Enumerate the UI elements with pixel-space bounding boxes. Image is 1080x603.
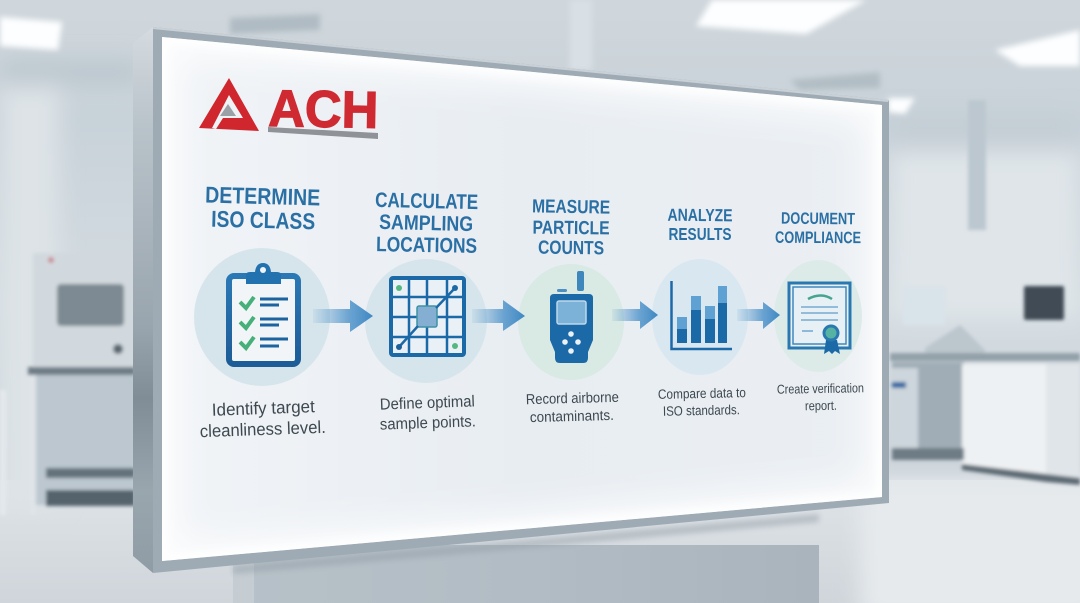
heading: ANALYZE	[667, 205, 733, 225]
description	[380, 393, 476, 434]
step 5: document compliance	[774, 210, 864, 413]
description: cleanliness level.	[199, 417, 326, 441]
description: Compare data to	[658, 385, 746, 402]
panel: signage content	[194, 78, 864, 441]
step 2: calculate sampling locations	[365, 189, 487, 434]
heading: CALCULATE	[375, 189, 478, 214]
arrow: step 3 to 4	[612, 301, 658, 329]
icon: bar chart	[672, 281, 732, 349]
sign screen	[162, 37, 882, 561]
logo wordmark: ACH	[268, 80, 379, 140]
heading: ISO CLASS	[211, 206, 316, 234]
heading	[375, 189, 478, 258]
icon circle	[518, 264, 624, 380]
description: Create verification	[777, 380, 864, 397]
description: sample points.	[380, 413, 476, 434]
arrow: step 1 to 2	[313, 300, 373, 332]
heading	[205, 182, 321, 234]
description	[526, 390, 619, 426]
icon: logo triangle	[199, 78, 259, 131]
process arrows	[313, 300, 780, 332]
heading: COUNTS	[538, 238, 604, 259]
description	[777, 380, 864, 413]
icon: certificate	[789, 283, 850, 354]
description	[658, 385, 746, 419]
heading: MEASURE	[532, 196, 610, 219]
arrow: step 4 to 5	[737, 302, 780, 329]
logo: ACH	[199, 78, 379, 140]
arrow: step 2 to 3	[472, 300, 525, 331]
sign frame	[133, 27, 889, 573]
heading	[775, 210, 861, 247]
heading	[532, 196, 610, 259]
heading: DOCUMENT	[781, 210, 855, 228]
icon circle	[194, 248, 330, 386]
heading: DETERMINE	[205, 182, 321, 211]
heading: LOCATIONS	[376, 233, 477, 258]
left equipment cabinet	[0, 253, 135, 515]
description: contaminants.	[530, 408, 614, 426]
heading: RESULTS	[668, 224, 732, 244]
description: report.	[805, 398, 837, 413]
description	[199, 396, 326, 441]
ceiling lights	[0, 0, 1080, 114]
description: ISO standards.	[663, 402, 740, 419]
icon circle	[365, 259, 487, 383]
heading: SAMPLING	[379, 211, 473, 236]
description: Identify target	[211, 396, 315, 420]
description: Define optimal	[380, 393, 475, 414]
logo underline	[268, 127, 378, 139]
step 4: analyze results	[652, 205, 748, 419]
icon: sampling grid	[391, 278, 464, 355]
heading: PARTICLE	[532, 218, 610, 239]
heading: COMPLIANCE	[775, 229, 861, 247]
step 1: determine ISO class	[194, 182, 330, 441]
icon circle	[652, 259, 748, 375]
icon circle	[774, 260, 862, 372]
description: Record airborne	[526, 390, 619, 408]
sign pedestal	[233, 514, 819, 603]
right lab equipment	[890, 100, 1080, 485]
icon: particle counter	[550, 271, 593, 363]
heading	[667, 205, 733, 244]
icon: clipboard	[229, 263, 298, 364]
step 3: measure particle counts	[518, 196, 624, 426]
